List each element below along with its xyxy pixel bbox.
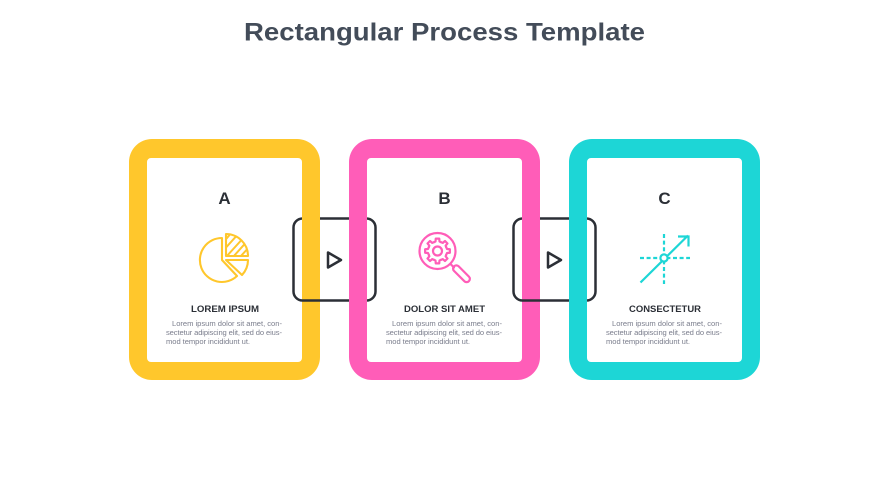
panel: card B frame (349, 139, 540, 380)
text block B: Lorem ipsum dolor sit amet, con- (392, 319, 502, 328)
text block A: Lorem ipsum dolor sit amet, con- (172, 319, 282, 328)
heading C: CONSECTETUR (629, 304, 701, 315)
text block B: mod tempor incididunt ut. (386, 337, 470, 346)
arrow: A to B (328, 252, 341, 268)
letter A: A (218, 189, 231, 208)
letter B: B (438, 189, 451, 208)
arrow: B to C (548, 252, 561, 268)
title: Rectangular Process Template (244, 18, 645, 46)
heading A: LOREM IPSUM (191, 304, 259, 315)
icon: pie chart (200, 232, 252, 282)
text block C: sectetur adipiscing elit, sed do eius- (606, 328, 722, 337)
text block B (386, 319, 502, 346)
text block C: Lorem ipsum dolor sit amet, con- (612, 319, 722, 328)
panel: card A frame (129, 139, 320, 380)
text block A: sectetur adipiscing elit, sed do eius- (166, 328, 282, 337)
text block A (166, 319, 282, 346)
panel: card C frame (569, 139, 760, 380)
icon: growth arrow on axes (640, 234, 690, 284)
heading B: DOLOR SIT AMET (404, 304, 485, 315)
letter C: C (658, 189, 671, 208)
connector: A to B (294, 214, 376, 305)
icon: gear in magnifier (420, 233, 471, 283)
text block C: mod tempor incididunt ut. (606, 337, 690, 346)
text block B: sectetur adipiscing elit, sed do eius- (386, 328, 502, 337)
text block C (606, 319, 722, 346)
text block A: mod tempor incididunt ut. (166, 337, 250, 346)
connector: B to C (514, 214, 596, 305)
